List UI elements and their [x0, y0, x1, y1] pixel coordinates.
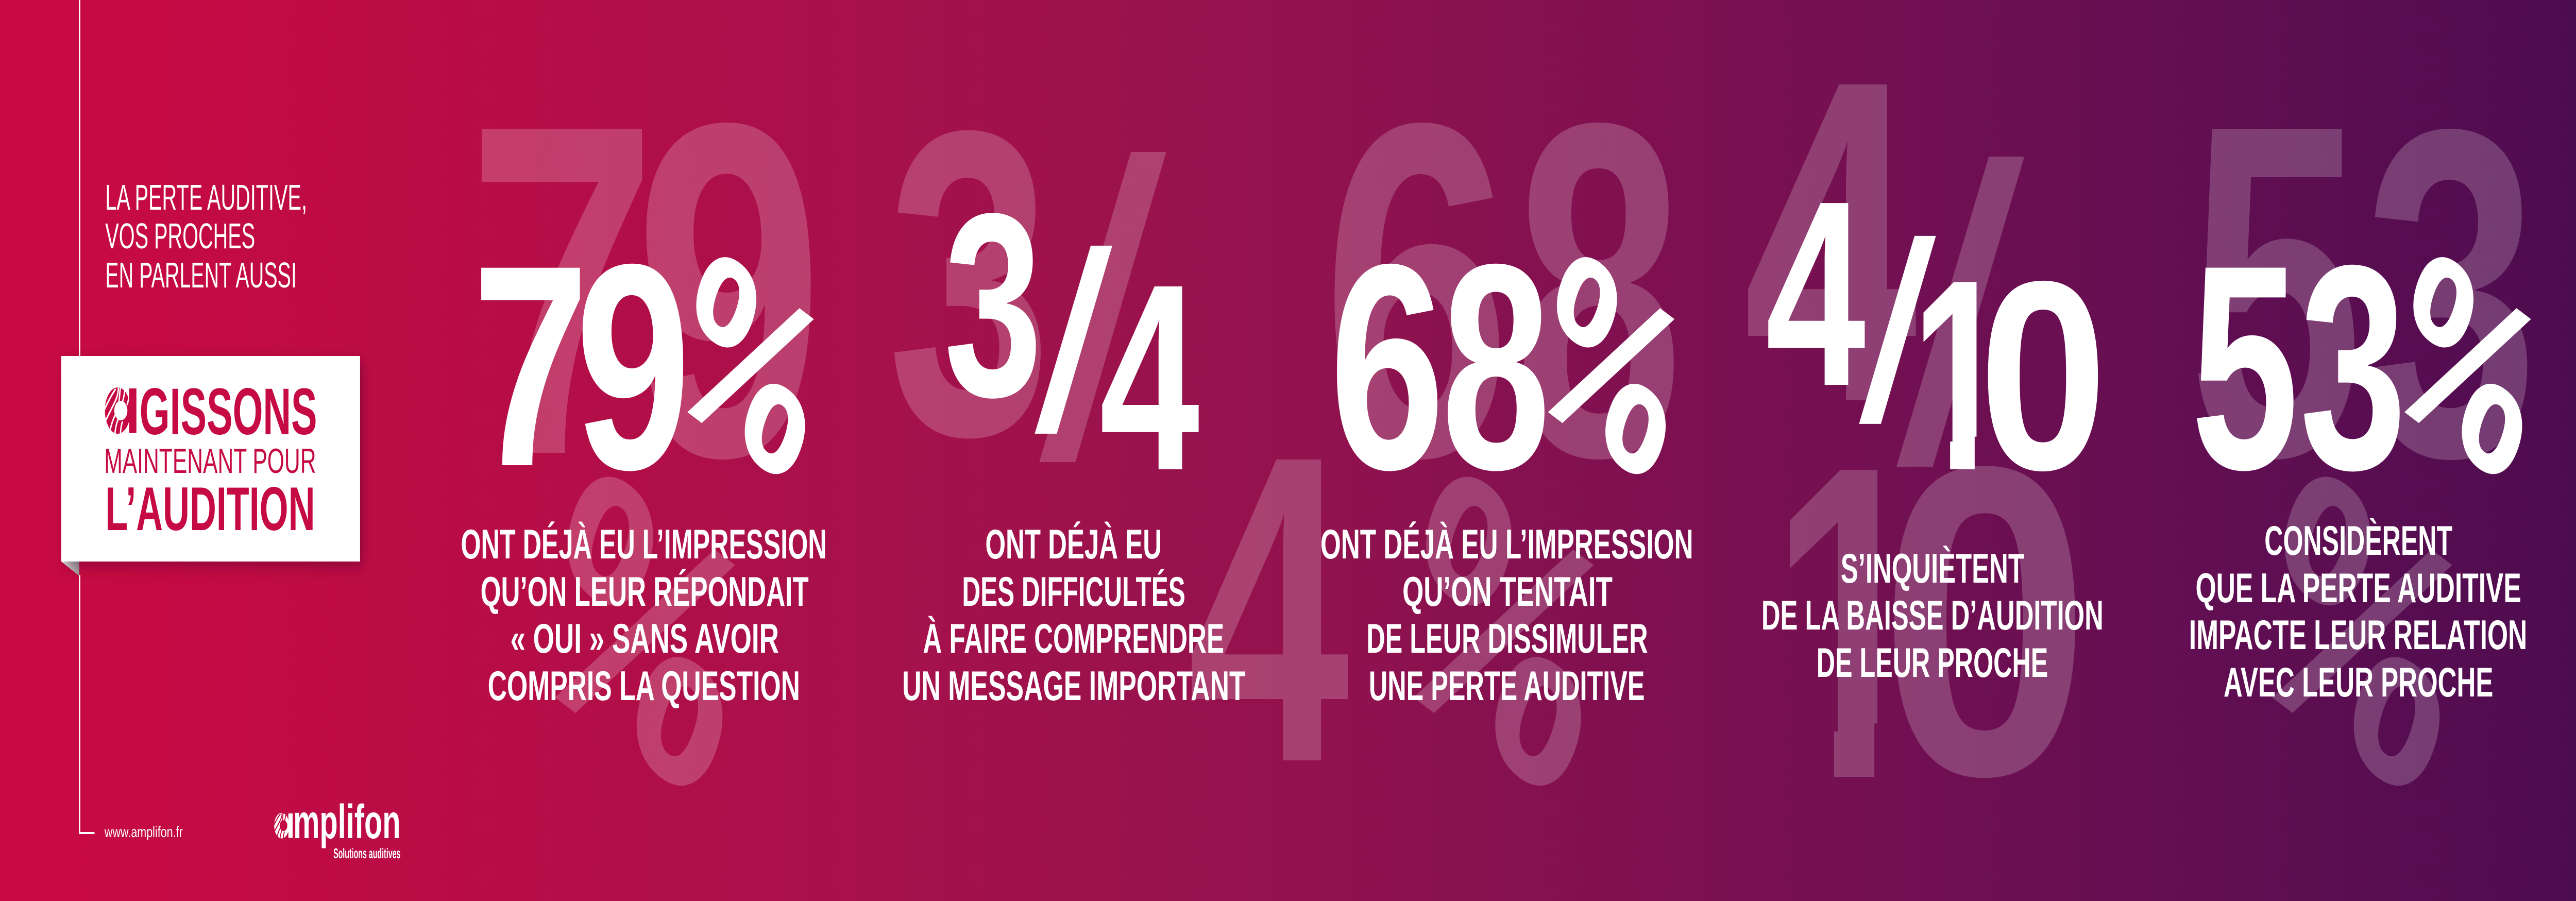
- caption: 79%: [461, 521, 827, 709]
- vertical rule with foot: [80, 0, 94, 833]
- statistic: 3/4: 4: [1099, 229, 1201, 526]
- logo tagline: Solutions auditives: [333, 845, 400, 862]
- statistic: 68%: %: [1504, 203, 1716, 535]
- caption: 4/10: [1761, 545, 2104, 686]
- caption: 79%: ONT DÉJÀ EU L’IMPRESSION: [461, 521, 827, 568]
- intro text: [105, 177, 307, 295]
- caption: 79%: COMPRIS LA QUESTION: [488, 662, 800, 709]
- caption: 68%: ONT DÉJÀ EU L’IMPRESSION: [1320, 521, 1693, 568]
- ghost numbers: 4/10: 4: [1743, 0, 1920, 498]
- ghost numbers: 68%: %: [1350, 400, 1653, 873]
- caption: 79%: « OUI » SANS AVOIR: [510, 615, 779, 662]
- caption: 53%: CONSIDÈRENT: [2264, 517, 2452, 564]
- ghost numbers: 53%: 3: [2364, 32, 2538, 554]
- statistic: 53%: 5: [2191, 205, 2299, 530]
- intro text: VOS PROCHES: [105, 216, 255, 256]
- statistic: 68%: 8: [1442, 203, 1551, 531]
- caption: 68%: UNE PERTE AUDITIVE: [1369, 662, 1645, 709]
- statistic: 53%: %: [2360, 203, 2573, 535]
- ghost numbers: 53%: 5: [2189, 27, 2363, 556]
- caption: 4/10: DE LA BAISSE D’AUDITION: [1761, 592, 2104, 639]
- statistic: 53%: [2191, 203, 2573, 535]
- statistic: 4/10: 0: [1979, 226, 2108, 526]
- icon: amplifon ear mark white: [274, 812, 293, 839]
- statistic: 4/10: 1: [1911, 224, 2009, 528]
- statistic: 4/10: [1768, 203, 2098, 472]
- ghost numbers: 68%: [1322, 24, 1683, 873]
- banner text: [104, 375, 317, 543]
- ghost numbers: 3/4: [888, 40, 1351, 853]
- caption: 53%: IMPACTE LEUR RELATION: [2189, 611, 2527, 658]
- ghost numbers: 4/10: [1748, 84, 2075, 778]
- statistic: 3/4: 3: [944, 159, 1042, 451]
- statistic: 4/10: /: [1859, 190, 1937, 476]
- banner text: MAINTENANT POUR: [104, 442, 316, 481]
- caption: 79%: QU’ON LEUR RÉPONDAIT: [481, 568, 809, 615]
- ghost numbers: 53%: [2189, 27, 2538, 873]
- statistic: 53%: 3: [2300, 204, 2406, 530]
- caption: 3/4: UN MESSAGE IMPORTANT: [902, 662, 1246, 709]
- caption: 3/4: DES DIFFICULTÉS: [962, 568, 1185, 615]
- statistic: 3/4: [944, 159, 1201, 526]
- statistic: 68%: [1329, 203, 1716, 535]
- caption: 3/4: ONT DÉJÀ EU: [985, 521, 1162, 568]
- website: www.amplifon.fr: [104, 824, 183, 841]
- banner card: [61, 356, 360, 562]
- statistic: 79%: [472, 203, 856, 535]
- panel: campaign banner: [61, 356, 360, 576]
- ghost numbers: 4/10: /: [1896, 80, 2026, 552]
- ghost numbers: 3/4: 4: [1188, 364, 1351, 853]
- ghost numbers: 4/10: 1: [1770, 374, 1931, 872]
- statistic: 79%: 9: [575, 204, 691, 531]
- caption: 4/10: S’INQUIÈTENT: [1841, 545, 2024, 592]
- caption: 3/4: À FAIRE COMPRENDRE: [923, 615, 1224, 662]
- ghost numbers: 79%: 9: [635, 25, 823, 556]
- ghost numbers: 68%: 8: [1514, 24, 1683, 556]
- ghost numbers: 3/4: 3: [888, 40, 1052, 526]
- caption: 53%: AVEC LEUR PROCHE: [2224, 659, 2493, 706]
- statistic: 3/4: /: [1035, 200, 1113, 486]
- ghost numbers: 4/10: 0: [1879, 375, 2091, 868]
- caption: 53%: QUE LA PERTE AUDITIVE: [2196, 565, 2521, 611]
- caption: 4/10: DE LEUR PROCHE: [1817, 639, 2048, 686]
- banner text: GISSONS: [140, 375, 317, 449]
- ghost numbers: 3/4: /: [1039, 76, 1168, 548]
- logo: amplifon: [274, 804, 400, 858]
- statistic: 79%: 7: [472, 206, 589, 526]
- statistic: 68%: 6: [1329, 204, 1445, 531]
- ghost numbers: 79%: [467, 25, 823, 873]
- caption: 53%: [2189, 517, 2527, 706]
- statistic: 4/10: 4: [1766, 146, 1867, 441]
- caption: 3/4: [902, 521, 1246, 709]
- caption: 68%: DE LEUR DISSIMULER: [1366, 615, 1648, 662]
- icon: amplifon ear mark: [104, 386, 137, 435]
- caption: 68%: QU’ON TENTAIT: [1402, 568, 1613, 615]
- statistic: 79%: %: [643, 203, 856, 535]
- caption: 68%: [1320, 521, 1693, 709]
- intro text: LA PERTE AUDITIVE,: [105, 177, 307, 217]
- logo wordmark: mplifon: [293, 794, 400, 848]
- ghost numbers: 68%: 6: [1322, 25, 1512, 556]
- banner text: L’AUDITION: [105, 474, 315, 543]
- intro text: EN PARLENT AUSSI: [105, 255, 297, 295]
- banner fold: [61, 562, 79, 576]
- ghost numbers: 79%: %: [492, 400, 794, 873]
- ghost numbers: 79%: 7: [467, 27, 657, 553]
- ghost numbers: 53%: %: [2209, 400, 2512, 873]
